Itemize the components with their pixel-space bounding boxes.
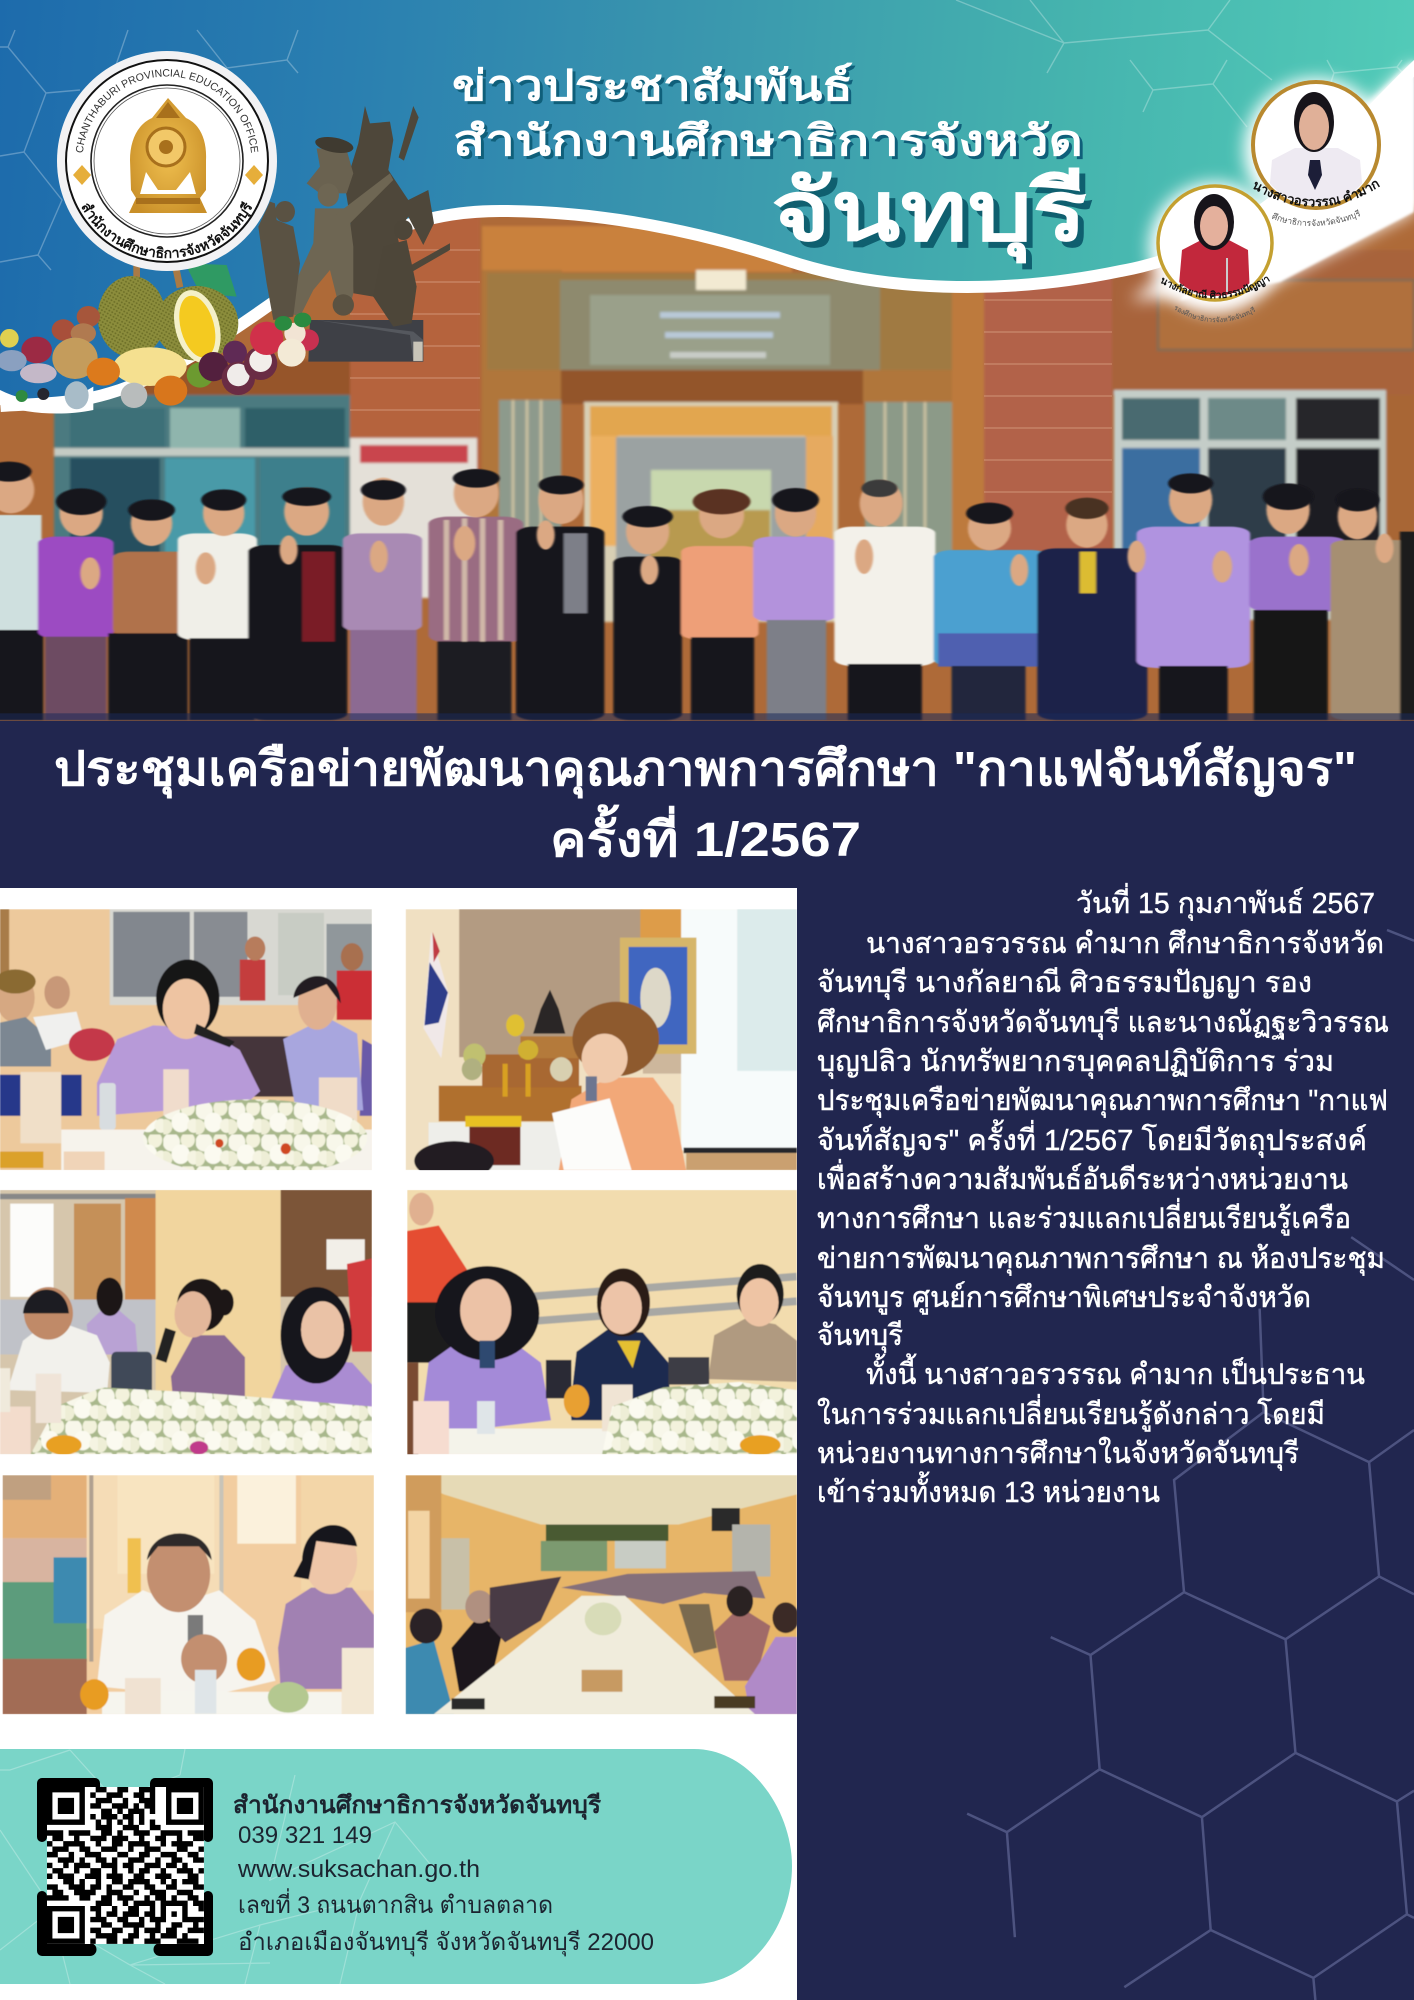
horse and rider — [307, 106, 450, 325]
contact details — [233, 1792, 654, 1957]
banner wave with white edge — [0, 0, 1414, 400]
contact panel — [0, 1749, 792, 1984]
brick lines — [350, 250, 1112, 492]
emblem: gold crest and wheel — [129, 98, 207, 213]
portrait: provincial education officer: ศึกษาธิการจังหวัดจันทบุรี — [1272, 209, 1360, 226]
article text: วันที่ 15 กุมภาพันธ์ 2567 — [1076, 883, 1375, 921]
article text: ในการร่วมแลกเปลี่ยนเรียนรู้ดังกล่าว โดยมี — [817, 1394, 1325, 1432]
contact details: อำเภอเมืองจันทบุรี จังหวัดจันทบุรี 22000 — [238, 1929, 654, 1957]
article text — [817, 883, 1389, 1509]
article text: ประชุมเครือข่ายพัฒนาคุณภาพการศึกษา "กาแฟ — [817, 1085, 1388, 1118]
right warrior — [373, 220, 417, 327]
main title — [54, 742, 1357, 867]
contact details: สำนักงานศึกษาธิการจังหวัดจันทบุรี — [233, 1792, 601, 1821]
main title: ประชุมเครือข่ายพัฒนาคุณภาพการศึกษา "กาแฟจันท์สัญจร" — [54, 742, 1357, 799]
heading: banner title: จันทบุรี — [771, 166, 1087, 264]
photo: officials at the table — [0, 1190, 372, 1455]
heading: banner title: ข่าวประชาสัมพันธ์ — [455, 65, 856, 113]
article text: หน่วยงานทางการศึกษาในจังหวัดจันทบุรี — [817, 1436, 1299, 1471]
article text: จันทบูร ศูนย์การศึกษาพิเศษประจำจังหวัด — [817, 1281, 1311, 1315]
photo: group in front of building — [0, 190, 1414, 721]
people row — [0, 462, 1414, 721]
banner hexagon pattern — [0, 0, 1405, 270]
article text: ศึกษาธิการจังหวัดจันทบุรี และนางณัฏฐะวิวรรณ — [817, 1007, 1389, 1040]
fruits and gems — [0, 253, 319, 414]
article text: จันทบุรี — [817, 1320, 903, 1353]
logo: Chanthaburi Provincial Education Office — [57, 51, 277, 271]
photo: man speaking with microphone — [3, 1475, 374, 1714]
contact details: www.suksachan.go.th — [237, 1856, 480, 1883]
article text: เข้าร่วมทั้งหมด 13 หน่วยงาน — [817, 1471, 1160, 1509]
portrait: deputy education officer: นางกัลยาณี ศิวธรรมปัญญา — [1160, 276, 1270, 299]
photo grid — [0, 909, 799, 1714]
walking warrior — [290, 173, 393, 317]
heading: banner title: สำนักงานศึกษาธิการจังหวัด — [453, 119, 1083, 165]
heading: banner title — [452, 62, 1093, 270]
article text: ข่ายการพัฒนาคุณภาพการศึกษา ณ ห้องประชุม — [817, 1243, 1385, 1276]
article text: ทางการศึกษา และร่วมแลกเปลี่ยนเรียนรู้เครือ — [817, 1198, 1351, 1236]
main title: ครั้งที่ 1/2567 — [550, 804, 861, 867]
article text: เพื่อสร้างความสัมพันธ์อันดีระหว่างหน่วยงาน — [817, 1159, 1348, 1196]
photo: wide view of the meeting room — [406, 1475, 799, 1714]
article text: ทั้งนี้ นางสาวอรวรรณ คำมาก เป็นประธาน — [866, 1353, 1365, 1391]
photo: speaker in lilac shirt — [0, 909, 372, 1176]
heading: banner title: ข่าวประชาสัมพันธ์ — [452, 62, 853, 110]
decorative hexagons — [967, 930, 1414, 2000]
photo: three women at the table — [407, 1190, 797, 1456]
contact details: 039 321 149 — [238, 1822, 372, 1849]
statue on pedestal — [258, 106, 450, 362]
logo: Chanthaburi Provincial Education Office: สำนักงานศึกษาธิการจังหวัดจันทบุรี — [82, 201, 252, 258]
portrait: provincial education officer — [1251, 80, 1381, 226]
heading: banner title: สำนักงานศึกษาธิการจังหวัด — [456, 122, 1086, 168]
contact details: เลขที่ 3 ถนนตากสิน ตำบลตลาด — [238, 1888, 553, 1919]
article text: จันท์สัญจร" ครั้งที่ 1/2567 โดยมีวัตถุประสงค์ — [817, 1119, 1367, 1158]
article text: บุญปลิว นักทรัพยากรบุคคลปฏิบัติการ ร่วม — [817, 1046, 1334, 1079]
portrait: deputy education officer: รองศึกษาธิการจังหวัดจันทบุรี — [1175, 306, 1255, 322]
left warrior — [258, 201, 300, 320]
logo: Chanthaburi Provincial Education Office: CHANTHABURI PROVINCIAL EDUCATION OFFICE — [76, 69, 258, 153]
white photo panel — [0, 888, 797, 2000]
article text: นางสาวอรวรรณ คำมาก ศึกษาธิการจังหวัด — [866, 928, 1384, 960]
heading: banner title: จันทบุรี — [777, 172, 1093, 270]
portrait: deputy education officer — [1156, 184, 1274, 322]
photo: speaker with shrine and flag — [406, 909, 797, 1181]
QR code — [37, 1778, 213, 1956]
article text: จันทบุรี นางกัลยาณี ศิวธรรมปัญญา รอง — [817, 967, 1312, 1000]
portrait: provincial education officer: นางสาวอรวรรณ คำมาก — [1253, 180, 1380, 207]
